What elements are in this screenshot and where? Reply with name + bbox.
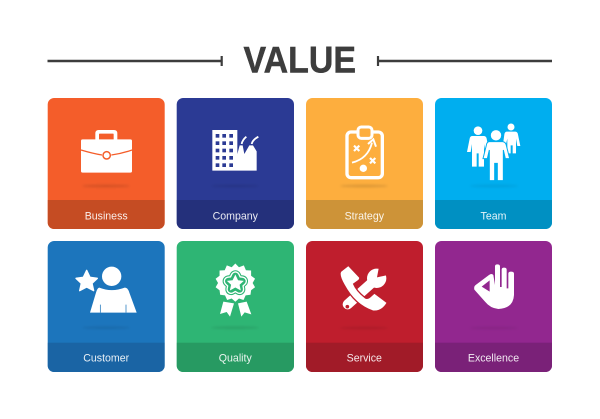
panel: Team — [435, 98, 552, 229]
icon: factory building — [212, 130, 258, 171]
label: Customer: Customer — [83, 352, 130, 364]
panel: Business — [48, 98, 165, 229]
right title rule — [378, 56, 552, 66]
panel: Customer — [48, 241, 165, 373]
label: Quality: Quality — [219, 352, 252, 364]
label: Business: Business — [85, 211, 128, 223]
label: Strategy: Strategy — [345, 211, 385, 223]
panel: Service — [306, 241, 423, 373]
label: Team: Team — [481, 211, 507, 223]
panel: Quality — [177, 241, 294, 373]
panel: Company — [177, 98, 294, 229]
title: VALUE — [244, 40, 356, 81]
panel: Excellence — [435, 241, 552, 373]
label: Service: Service — [347, 352, 382, 364]
panel: Strategy — [306, 98, 423, 229]
icon: three people — [467, 123, 520, 181]
left title rule — [48, 56, 222, 66]
label: Company: Company — [213, 211, 259, 223]
icon: customer with star — [76, 267, 137, 313]
icon: OK hand — [474, 264, 514, 309]
label: Excellence: Excellence — [468, 352, 519, 364]
icon: clipboard strategy — [347, 127, 382, 178]
icon: phone and wrench — [340, 265, 390, 311]
icon: award rosette — [216, 264, 255, 317]
icon: briefcase — [81, 130, 132, 173]
